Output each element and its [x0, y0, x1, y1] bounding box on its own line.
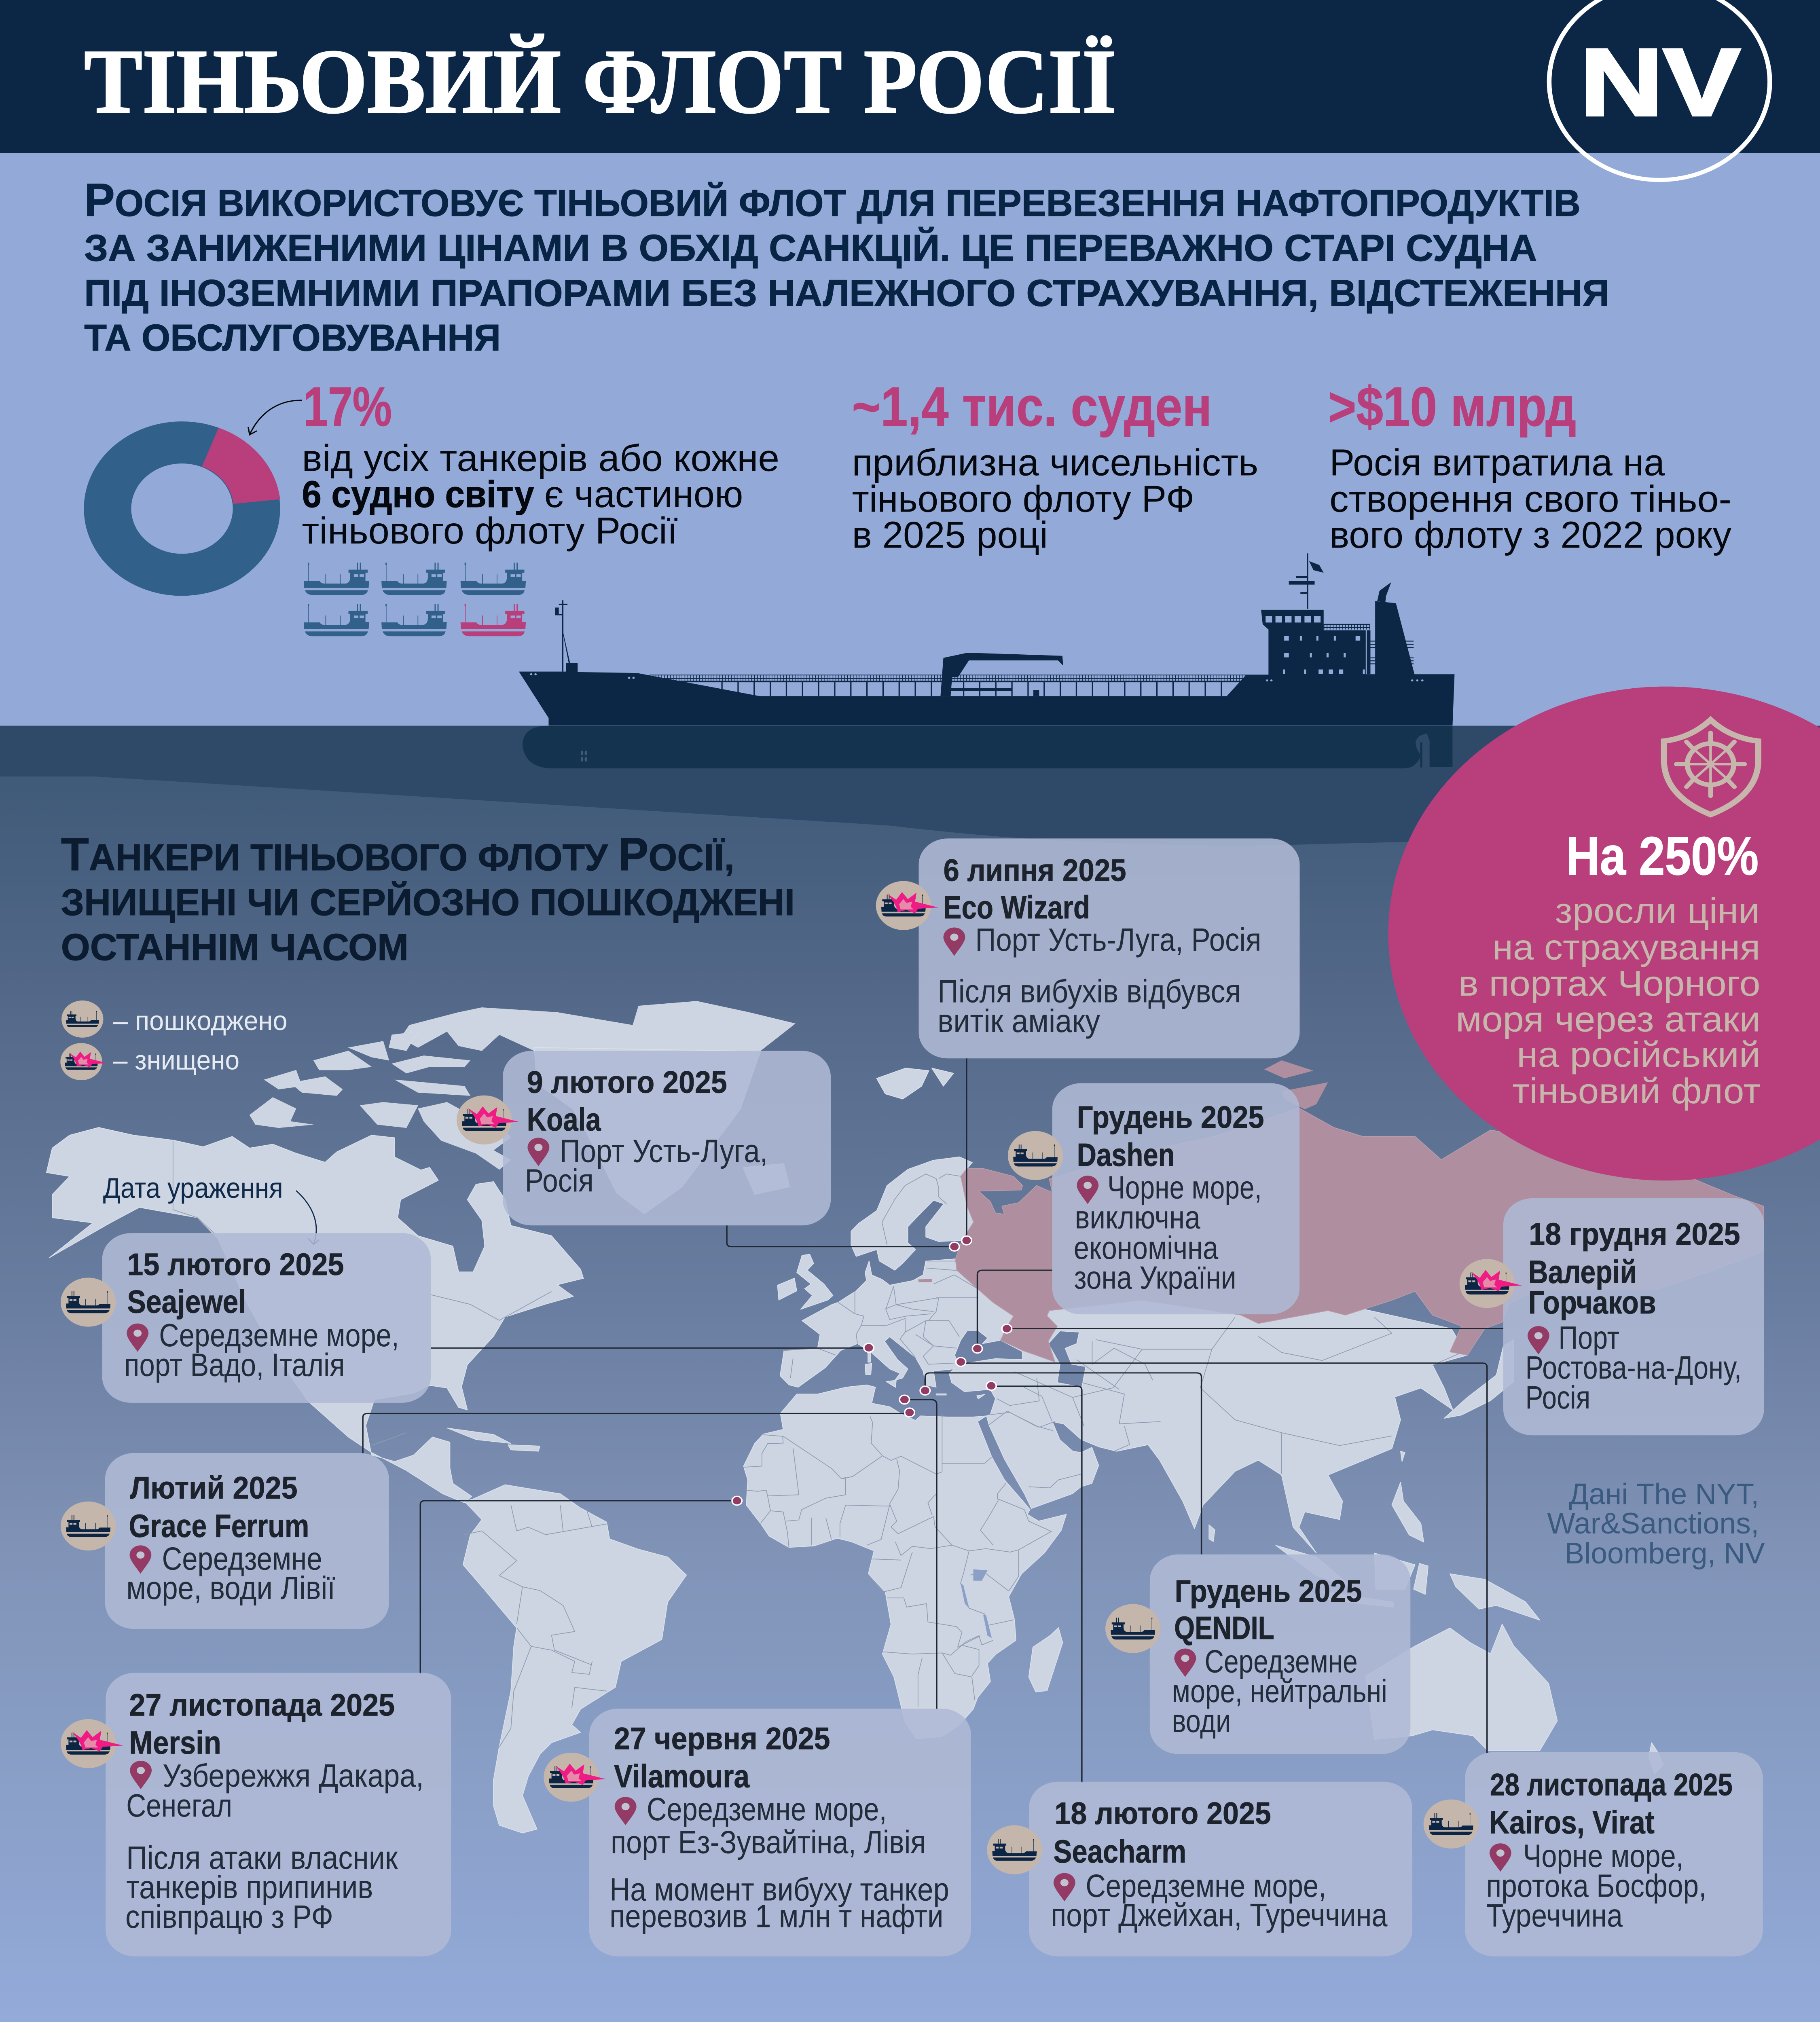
country borders: Europe and Middle East: [784, 1174, 1160, 1451]
card: Dashen: зона України: [1074, 1259, 1236, 1296]
donut chart: 17%: [108, 428, 280, 575]
card: Eco Wizard: [876, 838, 1300, 1058]
card: Mersin: Після атаки власник: [126, 1840, 398, 1876]
stat: 1.4 thousand vessels: приблизна чисельність: [852, 442, 1258, 483]
card: Kairos, Virat: Чорне море,: [1523, 1838, 1684, 1874]
card: Mersin: Mersin: [129, 1724, 221, 1760]
callout: insurance prices: [1388, 687, 1820, 1180]
land: British Isles: [777, 1254, 833, 1309]
land: Asia-Pacific islands: [1276, 1340, 1540, 1620]
card: Seajewel: [61, 1233, 431, 1403]
land: Eurasia without Russia: [780, 1259, 1467, 1553]
heading: tankers: ЗНИЩЕНІ ЧИ СЕРЙОЗНО ПОШКОДЖЕНІ: [61, 882, 795, 923]
tanker deck rails: [650, 624, 1414, 689]
source note: [1547, 1477, 1765, 1570]
card: Eco Wizard: Після вибухів відбувся: [938, 973, 1241, 1009]
card: Vilamoura: Vilamoura: [614, 1758, 750, 1794]
card: Seajewel: Середземне море,: [159, 1317, 399, 1353]
card: Eco Wizard: 6 липня 2025: [944, 853, 1126, 888]
stat: 17%: [302, 376, 779, 552]
stat: 10 billion: [1328, 376, 1732, 556]
heading: tankers: [61, 828, 795, 968]
card: Grace Ferrum: Середземне: [162, 1540, 322, 1576]
stat: 10 billion: вого флоту з 2022 року: [1329, 514, 1732, 556]
stat: 17%: 6 судно світу: [302, 474, 534, 515]
card: Mersin: Узбережжя Дакара,: [163, 1758, 424, 1794]
card: Mersin: [61, 1673, 451, 1956]
card: Kairos, Virat: Kairos, Virat: [1489, 1804, 1655, 1840]
stat: 10 billion: Росія витратила на: [1329, 442, 1665, 483]
card: Vilamoura: перевозив 1 млн т нафти: [609, 1898, 944, 1934]
card: Valerii Gorchakov: Порт: [1558, 1320, 1619, 1356]
card: Grace Ferrum: Grace Ferrum: [129, 1508, 309, 1544]
icons: six ships: [304, 563, 526, 636]
connector lines: [363, 1058, 1504, 1783]
stat: 10 billion: створення свого тіньо-: [1329, 478, 1731, 520]
card: Dashen: Чорне море,: [1107, 1169, 1262, 1205]
card: Koala: Порт Усть-Луга,: [560, 1133, 768, 1169]
card: QENDIL: Середземне: [1204, 1643, 1358, 1679]
tanker underwater hull: [523, 726, 1452, 768]
country borders: North America: [173, 1141, 552, 1446]
card: Seacharm: Seacharm: [1054, 1833, 1186, 1869]
card: Seacharm: порт Джейхан, Туреччина: [1051, 1897, 1388, 1933]
card: Seajewel: 15 лютого 2025: [127, 1247, 344, 1282]
header bar: [0, 0, 1820, 153]
land: Novaya Zemlya and Kaliningrad: [918, 1060, 1328, 1282]
card: QENDIL: [1105, 1555, 1410, 1754]
card: Koala: Росія: [525, 1162, 594, 1198]
land: Canadian arctic islands: [250, 1001, 796, 1170]
world map: [47, 1001, 1763, 1833]
card: QENDIL: QENDIL: [1174, 1610, 1274, 1646]
card: Valerii Gorchakov: Валерій: [1528, 1254, 1637, 1290]
heading: tankers: ОСТАННІМ ЧАСОМ: [61, 926, 408, 968]
stat: 17%: є частиною: [544, 474, 743, 515]
card: Vilamoura: [544, 1709, 971, 1956]
card: Valerii Gorchakov: 18 грудня 2025: [1529, 1217, 1740, 1252]
country borders: South America: [464, 1505, 609, 1747]
annotation: date of strike: Дата ураження: [103, 1172, 283, 1204]
land: Scandinavia: [851, 1157, 973, 1270]
land: Africa: [743, 1385, 1066, 1739]
card: Kairos, Virat: 28 листопада 2025: [1490, 1768, 1733, 1802]
card: Vilamoura: порт Ез-Зувайтіна, Лівія: [611, 1824, 926, 1860]
land: Russia: [955, 1108, 1763, 1362]
tanker windows: [530, 616, 1424, 681]
source note: Bloomberg, NV: [1564, 1536, 1765, 1570]
card: Valerii Gorchakov: Горчаков: [1528, 1284, 1656, 1320]
arrow to donut: [248, 400, 302, 435]
land: South America: [463, 1485, 686, 1833]
card: QENDIL: води: [1172, 1703, 1231, 1739]
intro text: ПІД ІНОЗЕМНИМИ ПРАПОРАМИ БЕЗ НАЛЕЖНОГО СТРАХУВАННЯ, ВІДСТЕЖЕННЯ: [84, 272, 1610, 314]
card: Vilamoura: 27 червня 2025: [614, 1722, 830, 1756]
legend: [60, 1000, 288, 1080]
source note: War&Sanctions,: [1547, 1506, 1759, 1540]
card: Mersin: 27 листопада 2025: [129, 1688, 395, 1722]
country borders: Asia: [1014, 1317, 1462, 1474]
intro text: ЗА ЗАНИЖЕНИМИ ЦІНАМИ В ОБХІД САНКЦІЙ. ЦЕ ПЕРЕВАЖНО СТАРІ СУДНА: [84, 227, 1537, 269]
card: Valerii Gorchakov: Росія: [1526, 1379, 1590, 1415]
tanker silhouette: [519, 553, 1454, 725]
card: Vilamoura: На момент вибуху танкер: [609, 1871, 949, 1907]
callout: insurance prices: тіньовий флот: [1512, 1071, 1761, 1111]
card: Dashen: [1008, 1083, 1299, 1314]
card: Mersin: танкерів припинив: [126, 1869, 373, 1905]
card: Dashen: економічна: [1074, 1230, 1219, 1266]
callout: insurance prices: на російський: [1517, 1034, 1761, 1074]
stat: 1.4 thousand vessels: тіньового флоту РФ: [852, 478, 1194, 520]
map location dots: [732, 1236, 1012, 1505]
card: Koala: [457, 1051, 831, 1225]
card: Koala: Koala: [527, 1101, 601, 1137]
card: Grace Ferrum: море, води Лівії: [126, 1570, 335, 1606]
callout: insurance prices: моря через атаки: [1456, 999, 1761, 1039]
card: Seajewel: порт Вадо, Італія: [124, 1347, 345, 1383]
card: Valerii Gorchakov: Ростова-на-Дону,: [1526, 1349, 1742, 1385]
card: Mersin: співпрацю з РФ: [125, 1898, 333, 1935]
card: Seacharm: [987, 1782, 1412, 1956]
card: Vilamoura: Середземне море,: [647, 1791, 887, 1827]
heading: tankers: ТАНКЕРИ ТІНЬОВОГО ФЛОТУ РОСІЇ,: [61, 828, 734, 880]
annotation: date of strike: [103, 1172, 319, 1244]
card: Dashen: виключна: [1075, 1199, 1200, 1235]
sea gradient with world ocean: [0, 776, 1820, 2022]
callout: insurance prices: зросли ціни: [1555, 890, 1760, 931]
stat: 17%: 17%: [303, 376, 392, 438]
stat: 10 billion: >$10 млрд: [1328, 376, 1576, 438]
card: QENDIL: море, нейтральні: [1172, 1673, 1387, 1709]
card: Seacharm: 18 лютого 2025: [1054, 1796, 1271, 1831]
card: Grace Ferrum: [61, 1453, 389, 1629]
card: Seajewel: Seajewel: [127, 1284, 246, 1320]
stat: 17%: тіньового флоту Росії: [302, 510, 678, 552]
logo: NV: [1549, 0, 1770, 180]
logo: NV: NV: [1580, 30, 1740, 136]
land: Greenland and other islands: [447, 1047, 954, 1451]
card: Grace Ferrum: Лютий 2025: [130, 1471, 298, 1505]
land: North America: [47, 1127, 584, 1503]
intro text: [84, 174, 1610, 359]
legend: – знищено: [113, 1045, 239, 1075]
sea top band: [0, 726, 1820, 867]
card: Eco Wizard: Порт Усть-Луга, Росія: [975, 922, 1261, 958]
card: Kairos, Virat: протока Босфор,: [1486, 1868, 1706, 1904]
legend: – пошкоджено: [113, 1006, 288, 1036]
callout: insurance prices: на страхування: [1492, 927, 1760, 967]
card: Kairos, Virat: [1424, 1752, 1763, 1956]
callout: insurance prices: На 250%: [1566, 826, 1759, 886]
card: Mersin: Сенегал: [126, 1787, 232, 1823]
stat: 17%: від усіх танкерів або кожне: [302, 437, 779, 479]
title: ТІНЬОВИЙ ФЛОТ РОСІЇ: [84, 31, 1116, 132]
card: Eco Wizard: Eco Wizard: [944, 889, 1090, 925]
card: Koala: 9 лютого 2025: [527, 1065, 727, 1100]
stat: 1.4 thousand vessels: [852, 376, 1258, 556]
card: Eco Wizard: витік аміаку: [938, 1003, 1100, 1039]
card: Valerii Gorchakov: [1460, 1198, 1764, 1435]
source note: Дані The NYT,: [1569, 1477, 1759, 1510]
card: Seacharm: Середземне море,: [1086, 1868, 1326, 1904]
card: Dashen: Грудень 2025: [1077, 1100, 1264, 1135]
icon: shield with ship wheel: [1664, 720, 1758, 814]
land: Australia and New Zealand: [1366, 1624, 1663, 1774]
stat: 1.4 thousand vessels: ~1,4 тис. суден: [852, 376, 1212, 438]
stat: 1.4 thousand vessels: в 2025 році: [852, 514, 1048, 556]
intro text: РОСІЯ ВИКОРИСТОВУЄ ТІНЬОВИЙ ФЛОТ ДЛЯ ПЕРЕВЕЗЕННЯ НАФТОПРОДУКТІВ: [84, 174, 1581, 226]
card: Dashen: Dashen: [1077, 1137, 1175, 1173]
card: Kairos, Virat: Туреччина: [1486, 1897, 1623, 1933]
land: Madagascar and islands: [865, 1352, 1215, 1692]
country borders: Africa: [647, 1411, 1081, 1731]
intro text: ТА ОБСЛУГОВУВАННЯ: [84, 317, 501, 359]
card: QENDIL: Грудень 2025: [1175, 1574, 1362, 1609]
callout: insurance prices: в портах Чорного: [1458, 963, 1761, 1003]
